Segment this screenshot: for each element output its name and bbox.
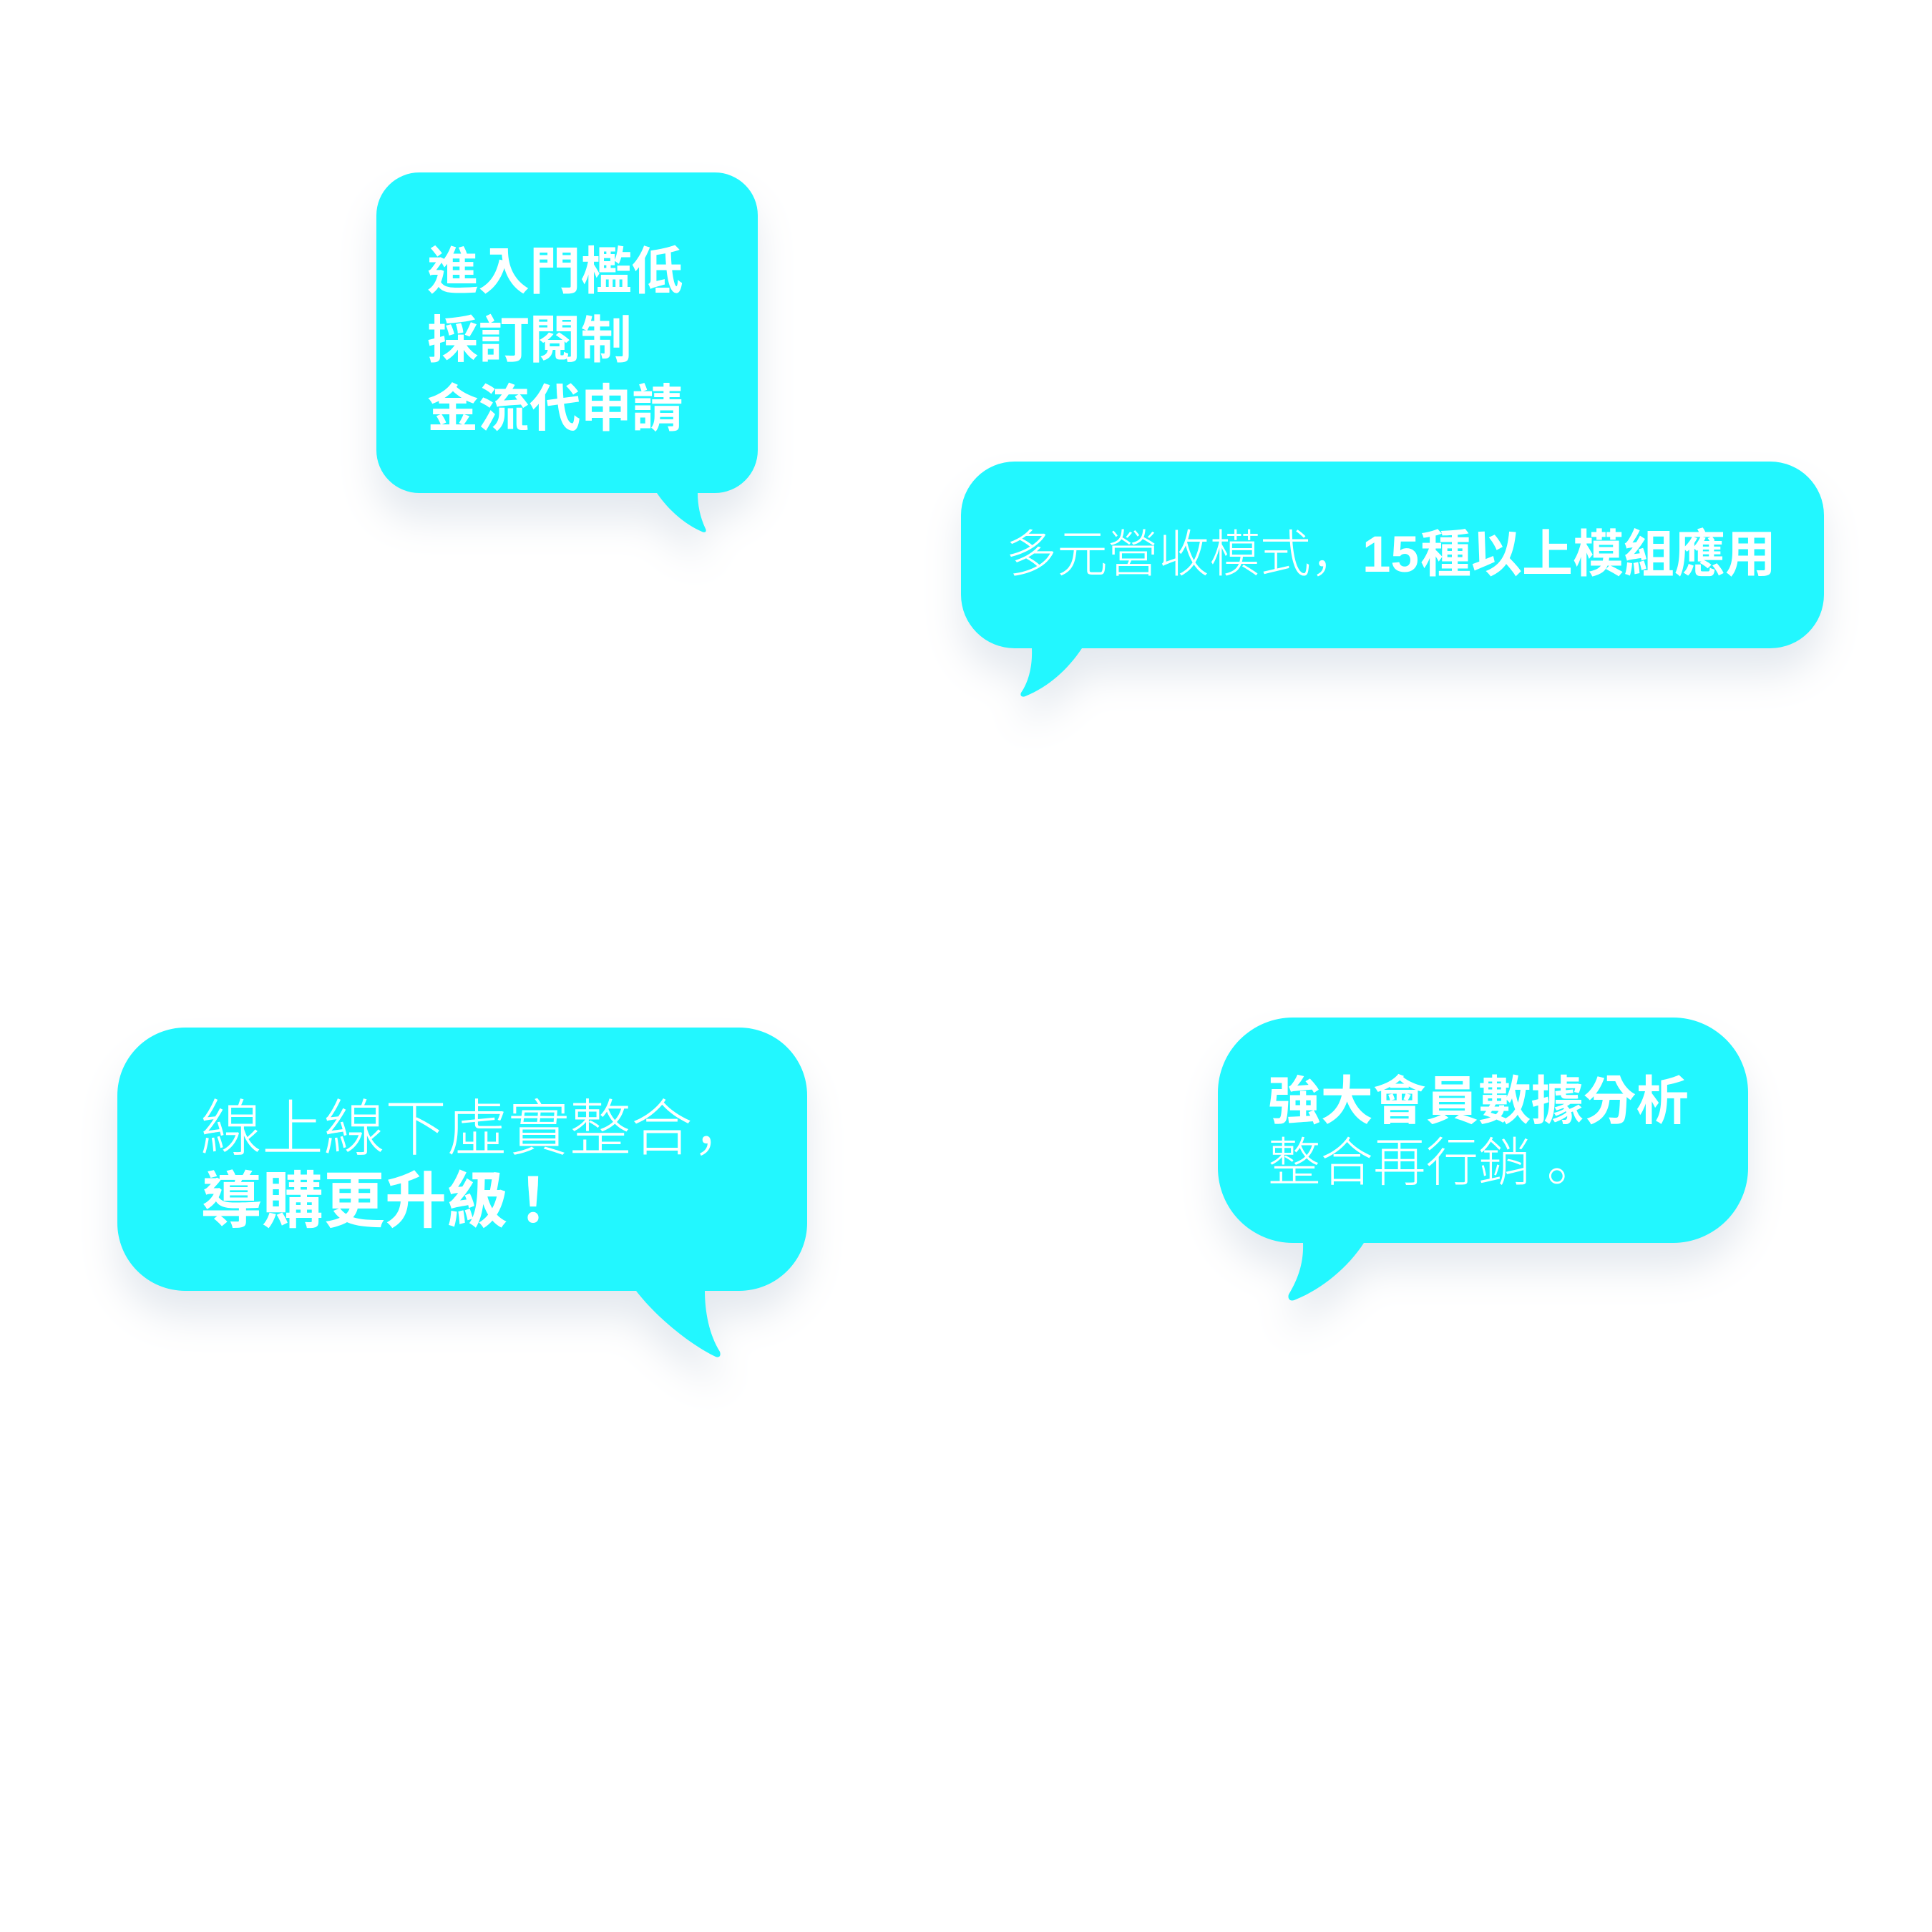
text: member data analytics: 強大會員數據分析: [1268, 1059, 1689, 1135]
text: entry threshold lines: 金流代申請: [427, 367, 683, 441]
text: entry threshold lines: 進入門檻低: [427, 230, 683, 304]
bubble shape with tail bottom right: [376, 172, 758, 532]
text: entry threshold lines: 採訂閱制: [427, 298, 632, 373]
bubble shape with tail bottom right: [117, 1028, 807, 1357]
text: entry threshold lines: [427, 230, 683, 441]
text: integrated remarketing: 整合再行銷 。: [1268, 1121, 1599, 1196]
text: revenue models: 15: [1362, 527, 1419, 583]
text: online and offline integration: 線上線下虛實整合，: [200, 1078, 754, 1168]
bubble shape with tail bottom left: [1218, 1018, 1748, 1300]
text: shopping guide upgrade: 導購更升級！: [200, 1151, 564, 1240]
panel: speech bubble bottom right: [1218, 1018, 1748, 1300]
bubble shape with tail bottom left: [961, 462, 1824, 697]
text: revenue models: 種以上模組應用: [1420, 514, 1776, 587]
panel: speech bubble top left: [376, 172, 758, 532]
text: revenue models: 多元營收模式，: [1006, 514, 1362, 587]
panel: speech bubble bottom left: [117, 1028, 807, 1357]
panel: speech bubble top right: [961, 462, 1824, 697]
